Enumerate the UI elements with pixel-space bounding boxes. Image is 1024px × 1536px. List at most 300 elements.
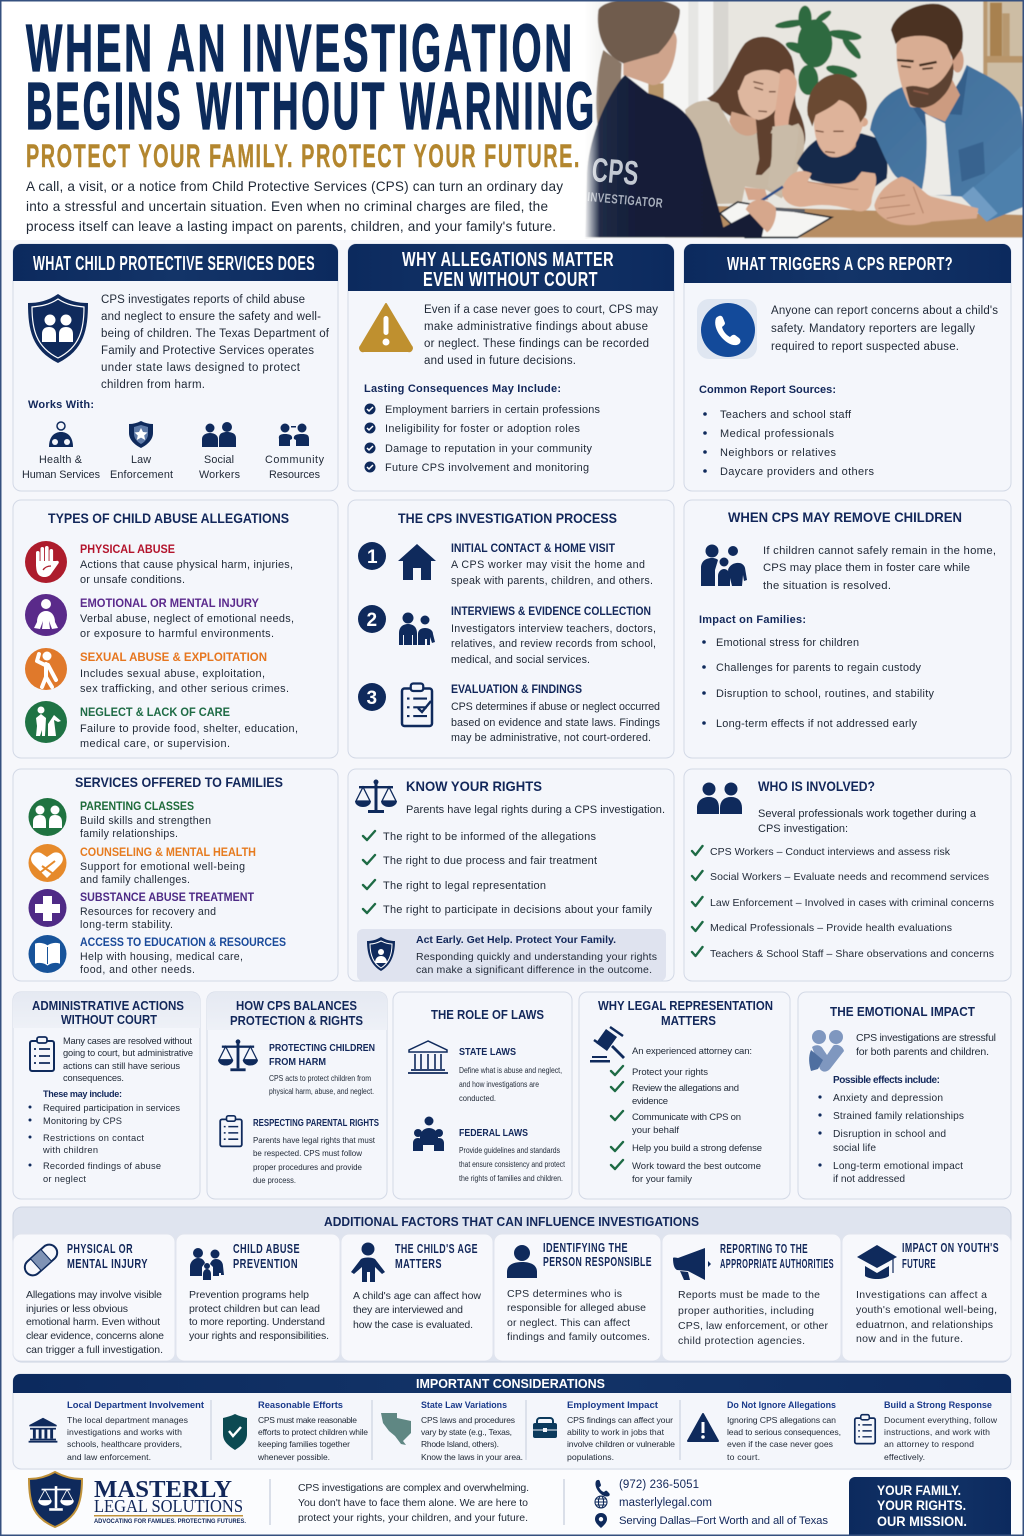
icon: physical abuse hand: [25, 541, 67, 583]
panel: CPS investigation process: THE CPS INVESTIGATION PROCESS: [398, 510, 617, 526]
step 1: speak with parents, children, and others.: [451, 575, 653, 587]
footer message: CPS investigations are complex and overwhelming.: [298, 1482, 529, 1494]
card: child abuse prevention: CHILD ABUSE: [233, 1242, 300, 1256]
consideration: employment impact: involve children or vulnerable: [567, 1439, 675, 1449]
panel: types of child abuse allegations: or unsafe conditions.: [80, 574, 185, 586]
consideration: reasonable efforts: efforts to protect children while: [258, 1427, 368, 1437]
card: child abuse prevention: your rights and responsibilities.: [189, 1330, 329, 1342]
involved checklist: Teachers & School Staff – Share observations and concerns: [710, 948, 994, 960]
contact details: [595, 1479, 828, 1528]
card: reporting to authorities: APPROPRIATE AUTHORITIES: [720, 1257, 834, 1271]
icon: counseling heart: [28, 844, 66, 882]
rights checklist: The right to participate in decisions about your family: [383, 904, 652, 916]
mission callout: YOUR RIGHTS.: [877, 1498, 966, 1513]
panel: why legal representation matters: MATTERS: [661, 1014, 716, 1028]
impact list: Long-term effects if not addressed early: [716, 718, 918, 730]
impact list: Disruption to school, routines, and stability: [716, 688, 935, 700]
card: physical or mental injury: Allegations may involve visible: [26, 1289, 162, 1301]
panel: types of child abuse allegations: or exposure to harmful environments.: [80, 628, 274, 640]
man hands: [874, 177, 978, 225]
panel: services offered to families: SERVICES OFFERED TO FAMILIES: [75, 774, 283, 790]
panel: what child protective services does: [13, 244, 338, 491]
card: physical or mental injury: [13, 1234, 175, 1361]
icon: substance treatment cross: [28, 889, 66, 927]
rights checklist: The right to due process and fair treatment: [383, 855, 597, 867]
consideration: reasonable efforts: CPS must make reasonable: [258, 1415, 357, 1425]
card: identifying the person: CPS determines who is: [507, 1288, 622, 1300]
involved checklist: Law Enforcement – Involved in cases with criminal concerns: [710, 897, 994, 909]
panel: how CPS balances protection and rights: RESPECTING PARENTAL RIGHTS: [253, 1118, 379, 1129]
consideration: build a strong response: Build a Strong Response: [884, 1400, 992, 1411]
mission callout: YOUR FAMILY.: [877, 1483, 961, 1498]
panel: administrative actions without court: actions can still have serious: [63, 1061, 180, 1071]
panel: the role of laws: the rights of families and children.: [459, 1174, 563, 1183]
panel: what child protective services does: and neglect to ensure the safety and well-: [101, 311, 321, 323]
attorney checklist: Protect your rights: [632, 1067, 708, 1078]
icon: shield with family: [28, 294, 88, 363]
step 2: Investigators interview teachers, doctors,: [451, 623, 656, 635]
panel: the emotional impact: Possible effects include:: [833, 1075, 940, 1086]
consideration: state law variations: Know the laws in your area.: [421, 1452, 523, 1462]
logo: Masterly Legal Solutions: MASTERLY: [94, 1477, 232, 1503]
panel: what child protective services does: Works With:: [28, 399, 94, 411]
woman hair back: [707, 37, 805, 175]
consideration: local department: and law enforcement.: [67, 1452, 151, 1462]
panel: who is involved: Several professionals work together during a: [758, 808, 977, 820]
effects list: Long-term emotional impact: [833, 1161, 963, 1172]
footer message: [298, 1482, 529, 1524]
card: child abuse prevention: to more reporting. Understand: [189, 1316, 325, 1328]
panel: why legal representation matters: WHY LEGAL REPRESENTATION: [598, 999, 773, 1013]
icon: social workers: [202, 422, 236, 447]
panel: why allegations matter: and used in future decisions.: [424, 355, 576, 367]
report sources list: Neighbors or relatives: [720, 447, 836, 459]
step 2: 2: [366, 610, 377, 631]
panel: the role of laws: that ensure consistency and protect: [459, 1160, 566, 1169]
panel: important considerations: [13, 1374, 1011, 1469]
card: child's age: MATTERS: [395, 1257, 442, 1271]
panel: the role of laws: Define what is abuse and neglect,: [459, 1066, 562, 1075]
panel: why allegations matter: EVEN WITHOUT COURT: [423, 269, 598, 291]
contact details: (972) 236-5051: [619, 1479, 699, 1491]
panel: how CPS balances protection and rights: FROM HARM: [269, 1057, 326, 1068]
involved checklist: CPS Workers – Conduct interviews and assess risk: [710, 846, 951, 858]
CPS jacket lettering: [587, 151, 664, 211]
panel: what child protective services does: Enforcement: [110, 469, 173, 481]
hero photo: CPS investigator with family: [584, 0, 1024, 238]
panel: types of child abuse allegations: SEXUAL ABUSE & EXPLOITATION: [80, 650, 267, 664]
actions list: Recorded findings of abuse: [43, 1161, 161, 1171]
panel: how CPS balances protection and rights: physical harm, abuse, and neglect.: [269, 1087, 374, 1096]
panel: additional factors: [13, 1207, 1011, 1362]
panel: what child protective services does: CPS investigates reports of child abuse: [101, 294, 305, 306]
consideration: do not ignore: to court.: [727, 1452, 760, 1462]
consideration: reasonable efforts: whenever possible.: [257, 1452, 330, 1462]
consideration: do not ignore: lead to serious consequences,: [727, 1427, 841, 1437]
panel: what child protective services does: Social: [204, 454, 234, 466]
icon: emotional family: [809, 1030, 844, 1072]
icon: family and child: [701, 544, 747, 586]
consideration: employment impact: Employment Impact: [567, 1400, 659, 1411]
panel: types of child abuse allegations: Verbal abuse, neglect of emotional needs,: [80, 613, 294, 625]
panel: the role of laws: FEDERAL LAWS: [459, 1128, 528, 1139]
icon: map pin: [595, 1513, 607, 1528]
panel: what triggers a CPS report: safety. Mandatory reporters are legally: [771, 323, 975, 335]
card: physical or mental injury: injuries or less obvious: [26, 1303, 128, 1315]
panel: how CPS balances protection and rights: [207, 992, 387, 1199]
panel: why allegations matter: Even if a case never goes to court, CPS may: [424, 304, 658, 316]
card: reporting to authorities: proper authorities, including: [678, 1305, 814, 1317]
card: identifying the person: or neglect. This can affect: [507, 1317, 630, 1329]
panel: the role of laws: and how investigations are: [459, 1080, 539, 1089]
step 2: INTERVIEWS & EVIDENCE COLLECTION: [451, 606, 651, 618]
intro paragraph: [26, 179, 563, 234]
card: physical or mental injury: MENTAL INJURY: [67, 1257, 148, 1271]
actions list: Restrictions on contact: [43, 1133, 144, 1143]
icon: community resources: [279, 424, 309, 446]
effects list: [818, 1093, 964, 1185]
logo: Masterly Legal Solutions: LEGAL SOLUTIONS: [94, 1496, 243, 1516]
intro paragraph: process itself can leave a lasting impact on parents, children, and your family's future.: [26, 219, 556, 234]
panel: types of child abuse allegations: medical care, or supervision.: [80, 738, 230, 750]
panel: the emotional impact: CPS investigations are stressful: [856, 1032, 996, 1044]
icon: neglect: [25, 701, 67, 743]
consideration: employment impact: CPS findings can affect your: [567, 1415, 673, 1425]
card: physical or mental injury: clear evidence, concerns alone: [26, 1330, 164, 1342]
panel: types of child abuse allegations: Includes sexual abuse, exploitation,: [80, 668, 265, 680]
panel: what child protective services does: Resources: [269, 469, 321, 481]
step 1: A CPS worker may visit the home and: [451, 559, 645, 571]
panel: how CPS balances protection and rights: PROTECTION & RIGHTS: [230, 1014, 363, 1028]
impact list: Emotional stress for children: [716, 637, 859, 649]
title: WHEN AN INVESTIGATION: [26, 11, 575, 86]
icon: health services: [49, 422, 73, 447]
report sources list: Daycare providers and others: [720, 466, 874, 478]
panel: the role of laws: STATE LAWS: [459, 1047, 516, 1058]
card: reporting to authorities: Reports must be made to the: [678, 1289, 820, 1301]
card: child abuse prevention: Prevention programs help: [189, 1289, 309, 1301]
mission callout: OUR MISSION.: [877, 1514, 967, 1529]
effects list: Anxiety and depression: [833, 1093, 943, 1104]
card: reporting to authorities: CPS, law enforcement, or other: [678, 1320, 828, 1332]
card: identifying the person: findings and family outcomes.: [507, 1331, 650, 1343]
woman neck and face: [729, 112, 757, 136]
consideration: local department: The local department manages: [67, 1415, 189, 1425]
card: identifying the person: IDENTIFYING THE: [543, 1241, 628, 1255]
panel: who is involved: [684, 769, 1011, 981]
consideration: state law variations: Rhode Island, others).: [421, 1439, 499, 1449]
panel: additional factors: ADDITIONAL FACTORS THAT CAN INFLUENCE INVESTIGATIONS: [324, 1214, 699, 1229]
consequences list: Employment barriers in certain professions: [385, 404, 601, 416]
consideration: employment impact: populations.: [567, 1452, 614, 1462]
panel: why legal representation matters: [579, 992, 790, 1199]
attorney checklist: [611, 1066, 762, 1185]
icon: warning triangle: [360, 304, 412, 351]
panel: what child protective services does: Law: [131, 454, 151, 466]
CPS jacket lettering: INVESTIGATOR: [587, 189, 664, 211]
panel: what child protective services does: Human Services: [22, 469, 101, 481]
panel: what child protective services does: WHAT CHILD PROTECTIVE SERVICES DOES: [33, 253, 315, 275]
consideration: local department: [29, 1400, 205, 1462]
card: identifying the person: PERSON RESPONSIBLE: [543, 1255, 652, 1269]
panel: types of child abuse allegations: [13, 500, 338, 758]
card: child's age: THE CHILD'S AGE: [395, 1242, 478, 1256]
panel: services offered to families: Help with housing, medical care,: [80, 951, 243, 963]
plant: [775, 6, 863, 95]
report sources list: Medical professionals: [720, 428, 834, 440]
attorney checklist: evidence: [632, 1096, 668, 1107]
panel: why legal representation matters: An experienced attorney can:: [632, 1046, 752, 1057]
panel: administrative actions without court: Many cases are resolved without: [63, 1036, 192, 1046]
attorney checklist: Communicate with CPS on: [632, 1112, 741, 1123]
report sources list: Teachers and school staff: [720, 409, 852, 421]
panel: the emotional impact: THE EMOTIONAL IMPACT: [830, 1005, 975, 1019]
step 2: relatives, and review records from school,: [451, 638, 656, 650]
icon: courthouse: [408, 1041, 448, 1073]
card: physical or mental injury: emotional harm. Even without: [26, 1316, 160, 1328]
impact list: [702, 637, 935, 730]
card: physical or mental injury: PHYSICAL OR: [67, 1242, 133, 1256]
mission callout: [849, 1477, 1011, 1536]
card: impact on youth's future: [842, 1234, 1011, 1361]
attorney checklist: Work toward the best outcome: [632, 1161, 761, 1172]
panel: what triggers a CPS report: [684, 244, 1011, 491]
title: [26, 11, 597, 144]
panel: why allegations matter: [348, 244, 674, 491]
panel: what triggers a CPS report: Anyone can report concerns about a child's: [771, 305, 998, 317]
card: child's age: they are interviewed and: [353, 1304, 463, 1316]
callout: act early: can make a significant difference in the outcome.: [416, 964, 652, 976]
step 1: 1: [367, 547, 378, 568]
consideration: do not ignore: Do Not Ignore Allegations: [727, 1400, 836, 1411]
icon: gavel: [590, 1027, 624, 1062]
card: physical or mental injury: can trigger a full investigation.: [26, 1344, 163, 1356]
step 3: CPS determines if abuse or neglect occurred: [451, 701, 660, 713]
panel: how CPS balances protection and rights: due process.: [253, 1175, 296, 1185]
impact list: Challenges for parents to regain custody: [716, 662, 922, 674]
attorney checklist: Review the allegations and: [632, 1083, 739, 1094]
panel: services offered to families: ACCESS TO EDUCATION & RESOURCES: [80, 937, 286, 949]
room: [585, 0, 1024, 238]
consideration: build a strong response: instructions, and work with: [884, 1427, 990, 1437]
panel: what child protective services does: being of children. The Texas Department of: [101, 328, 330, 340]
consequences list: [364, 404, 601, 474]
footer message: protect your rights, your children, and your future.: [298, 1512, 528, 1524]
man shirt: [870, 65, 1024, 222]
panel: types of child abuse allegations: EMOTIONAL OR MENTAL INJURY: [80, 596, 259, 610]
panel: services offered to families: SUBSTANCE ABUSE TREATMENT: [80, 892, 254, 904]
card: child's age: how the case is evaluated.: [353, 1319, 473, 1331]
panel: why allegations matter: make administrative findings about abuse: [424, 321, 648, 333]
panel: services offered to families: Support for emotional well-being: [80, 861, 245, 873]
step 2: medical, and social services.: [451, 654, 590, 666]
panel: services offered to families: food, and other needs.: [80, 964, 195, 976]
panel: when CPS may remove children: Impact on Families:: [699, 614, 806, 626]
effects list: social life: [833, 1143, 876, 1154]
attorney checklist: Help you build a strong defense: [632, 1143, 762, 1154]
table: [717, 206, 1024, 237]
panel: know your rights: [348, 769, 674, 981]
panel: how CPS balances protection and rights: HOW CPS BALANCES: [236, 999, 357, 1013]
card: reporting to authorities: REPORTING TO THE: [720, 1242, 808, 1256]
consideration: local department: investigations and works with: [67, 1427, 182, 1437]
card: impact on youth's future: FUTURE: [902, 1257, 936, 1271]
panel: when CPS may remove children: If children cannot safely remain in the home,: [763, 545, 996, 557]
consequences list: Damage to reputation in your community: [385, 443, 593, 455]
panel: services offered to families: [13, 769, 338, 981]
panel: how CPS balances protection and rights: be respected. CPS must follow: [253, 1148, 363, 1158]
panel: when CPS may remove children: WHEN CPS MAY REMOVE CHILDREN: [728, 509, 962, 525]
icon: badge: [129, 421, 153, 448]
panel: the role of laws: [393, 992, 572, 1199]
panel: administrative actions without court: These may include:: [43, 1089, 122, 1099]
panel: who is involved: CPS investigation:: [758, 823, 848, 835]
panel: the emotional impact: [798, 992, 1011, 1199]
involved checklist: Medical Professionals – Provide health evaluations: [710, 922, 952, 934]
step 3: 3: [366, 688, 377, 709]
actions list: with children: [42, 1145, 98, 1155]
panel: administrative actions without court: WITHOUT COURT: [61, 1013, 157, 1027]
icon: parenting: [28, 798, 66, 836]
step 2: [358, 605, 656, 666]
icon: emotional injury: [25, 594, 67, 636]
man neck, face and hair: [915, 78, 960, 122]
card: identifying the person: responsible for alleged abuse: [507, 1302, 646, 1314]
card: impact on youth's future: Investigations can affect a: [856, 1289, 987, 1301]
consideration: build a strong response: effectively.: [884, 1452, 925, 1462]
icon: scales: [355, 780, 397, 813]
panel: know your rights: KNOW YOUR RIGHTS: [406, 778, 542, 794]
consideration: state law variations: State Law Variations: [421, 1400, 507, 1411]
actions list: or neglect: [43, 1174, 86, 1184]
consideration: state law variations: CPS laws and procedures: [421, 1415, 515, 1425]
panel: who is involved: WHO IS INVOLVED?: [758, 779, 875, 794]
card: child abuse prevention: protect children but can lead: [189, 1303, 320, 1315]
attorney checklist: your behalf: [632, 1125, 679, 1136]
panel: services offered to families: family relationships.: [80, 828, 178, 840]
panel: know your rights: Parents have legal rights during a CPS investigation.: [406, 804, 665, 816]
panel: what triggers a CPS report: Common Report Sources:: [699, 384, 836, 396]
card: child abuse prevention: [176, 1234, 340, 1361]
consideration: do not ignore: Ignoring CPS allegations can: [727, 1415, 836, 1425]
icon: book: [28, 935, 66, 973]
boy neck, face and hair: [825, 132, 857, 155]
panel: administrative actions without court: [13, 992, 200, 1199]
consideration: state law variations: [381, 1400, 523, 1462]
consideration: local department: Local Department Involvement: [67, 1400, 205, 1411]
panel: the emotional impact: for both parents and children.: [856, 1046, 989, 1058]
involved checklist: Social Workers – Evaluate needs and recommend services: [710, 871, 989, 883]
callout: act early: Act Early. Get Help. Protect Your Family.: [416, 934, 616, 946]
panel: when CPS may remove children: [684, 500, 1011, 758]
consideration: build a strong response: an attorney to respond: [884, 1439, 974, 1449]
panel: when CPS may remove children: CPS may place them in foster care while: [763, 562, 970, 574]
logo: Masterly Legal Solutions: ADVOCATING FOR FAMILIES. PROTECTING FUTURES.: [94, 1518, 246, 1525]
panel: types of child abuse allegations: PHYSICAL ABUSE: [80, 542, 175, 556]
card: identifying the person: [494, 1234, 661, 1361]
subtitle: PROTECT YOUR FAMILY. PROTECT YOUR FUTURE.: [26, 138, 581, 174]
effects list: Disruption in school and: [833, 1129, 946, 1140]
contact details: Serving Dallas–Fort Worth and all of Texas: [619, 1515, 828, 1527]
panel: administrative actions without court: going to court, but administrative: [63, 1048, 193, 1058]
step 3: may be administrative, not court-ordered.: [451, 732, 651, 744]
icon: clipboard: [30, 1037, 54, 1071]
rights checklist: The right to be informed of the allegations: [383, 831, 596, 843]
boy arms: [782, 171, 876, 211]
consideration: state law variations: vary by state (e.g., Texas,: [421, 1427, 512, 1437]
panel: important considerations: IMPORTANT CONSIDERATIONS: [416, 1376, 605, 1391]
CPS jacket lettering: CPS: [590, 151, 640, 193]
panel: what triggers a CPS report: required to report suspected abuse.: [771, 341, 959, 353]
icon: professionals: [697, 782, 742, 814]
icon: sexual abuse figure: [25, 648, 67, 690]
icon: scales: [218, 1039, 258, 1071]
panel: why allegations matter: Lasting Consequences May Include:: [364, 383, 561, 395]
panel: types of child abuse allegations: Failure to provide food, shelter, education,: [80, 723, 298, 735]
panel: services offered to families: Resources for recovery and: [80, 906, 216, 918]
attorney checklist: for your family: [632, 1174, 692, 1185]
panel: what child protective services does: Workers: [199, 469, 241, 481]
panel: the role of laws: Provide guidelines and standards: [459, 1146, 560, 1155]
icon: federal group: [413, 1116, 444, 1151]
icon: phone: [595, 1480, 610, 1497]
card: child's age: A child's age can affect how: [353, 1290, 481, 1302]
step 3: [358, 683, 660, 744]
panel: what child protective services does: Family and Protective Services operates: [101, 345, 314, 357]
consideration: reasonable efforts: Reasonable Efforts: [258, 1400, 343, 1411]
logo: Masterly Legal Solutions: [29, 1472, 246, 1527]
card: impact on youth's future: now and in the future.: [856, 1333, 963, 1345]
consideration: build a strong response: Document everything, follow: [884, 1415, 998, 1425]
panel: what child protective services does: Community: [265, 454, 325, 466]
panel: how CPS balances protection and rights: proper procedures and provide: [253, 1162, 362, 1172]
panel: how CPS balances protection and rights: Parents have legal rights that must: [253, 1135, 376, 1145]
card: reporting to authorities: [662, 1234, 841, 1361]
rights checklist: [363, 831, 652, 916]
consideration: do not ignore: even if the case never goes: [727, 1439, 834, 1449]
panel: the role of laws: conducted.: [459, 1094, 496, 1103]
effects list: if not addressed: [833, 1174, 905, 1185]
rights checklist: The right to legal representation: [383, 880, 546, 892]
contact details: masterlylegal.com: [619, 1497, 712, 1509]
panel: types of child abuse allegations: NEGLECT & LACK OF CARE: [80, 705, 230, 719]
panel: why allegations matter: WHY ALLEGATIONS MATTER: [402, 249, 614, 271]
panel: administrative actions without court: ADMINISTRATIVE ACTIONS: [32, 999, 184, 1013]
panel: types of child abuse allegations: Actions that cause physical harm, injuries,: [80, 559, 293, 571]
panel: how CPS balances protection and rights: PROTECTING CHILDREN: [269, 1043, 375, 1054]
card: impact on youth's future: eduatrnon, and relationships: [856, 1319, 993, 1331]
report sources list: [703, 409, 874, 478]
step 1: [358, 542, 653, 587]
panel: services offered to families: long-term stability.: [80, 919, 173, 931]
boy shirt: [797, 133, 888, 187]
icon: phone: [697, 299, 757, 359]
consequences list: Future CPS involvement and monitoring: [385, 462, 589, 474]
panel: how CPS balances protection and rights: CPS acts to protect children from: [269, 1074, 371, 1083]
consideration: employment impact: ability to work in jobs that: [567, 1427, 665, 1437]
callout: act early: [357, 929, 666, 981]
icon: globe: [595, 1496, 607, 1508]
consideration: employment impact: [533, 1400, 675, 1462]
panel: types of child abuse allegations: sex trafficking, and other serious crimes.: [80, 683, 289, 695]
step 1: INITIAL CONTACT & HOME VISIT: [451, 543, 615, 555]
woman sweater: [685, 101, 804, 204]
panel: what child protective services does: under state laws designed to protect: [101, 362, 301, 374]
clipboard: [720, 202, 832, 237]
panel: when CPS may remove children: the situation is resolved.: [763, 580, 891, 592]
consequences list: Ineligibility for foster or adoption roles: [385, 423, 581, 435]
step 3: EVALUATION & FINDINGS: [451, 684, 582, 696]
